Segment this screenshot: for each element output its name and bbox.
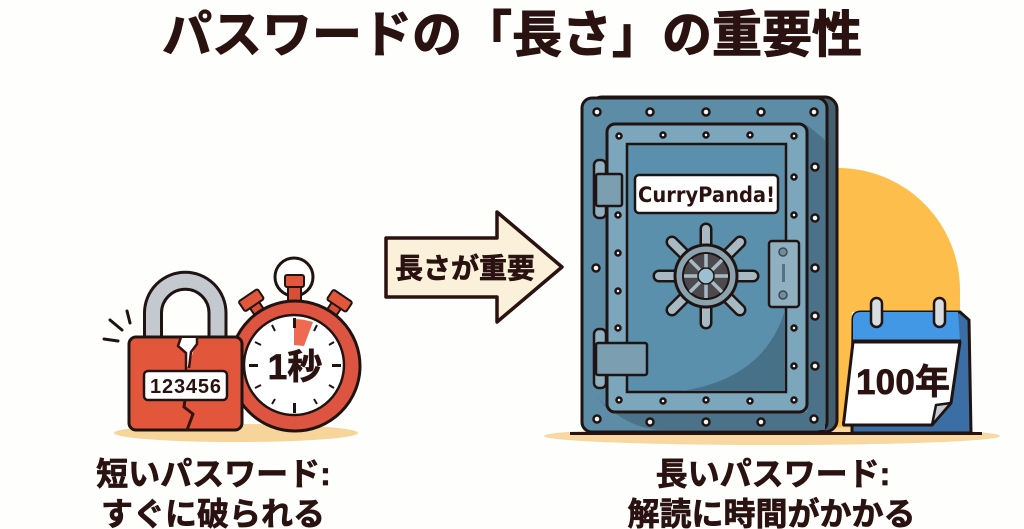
bottom hinge	[594, 329, 647, 388]
password label: CurryPanda!: CurryPanda!	[638, 183, 775, 207]
password label: 123456: 123456	[150, 376, 221, 398]
icon: calendar: 100年	[856, 363, 950, 402]
caption: short password: 短いパスワード:	[96, 456, 331, 492]
caption: long password	[627, 456, 916, 529]
long password illustration	[544, 97, 1000, 445]
yellow sun backdrop	[830, 168, 960, 433]
arrow: 長さが重要	[395, 252, 535, 284]
vault wheel	[659, 229, 753, 323]
icon: cracked padlock	[129, 281, 242, 430]
rivets	[592, 108, 818, 426]
icon: vault door	[582, 97, 837, 432]
icon: stopwatch: 1秒	[268, 348, 322, 387]
ground shadow and line	[544, 427, 1000, 445]
caption: short password	[96, 456, 331, 529]
password label: CurryPanda!	[635, 175, 778, 213]
title: パスワードの「長さ」の重要性	[162, 7, 862, 63]
password label: 123456	[144, 371, 227, 400]
short password illustration	[104, 258, 360, 442]
icon: impact marks	[104, 311, 130, 341]
top hinge	[594, 160, 622, 218]
caption: long password: 長いパスワード:	[656, 456, 890, 492]
arrow	[386, 212, 562, 322]
latch	[769, 241, 799, 307]
ground shadow: lock	[114, 424, 358, 442]
inner panel	[627, 144, 786, 392]
icon: calendar	[844, 298, 971, 433]
icon: stopwatch	[230, 258, 360, 431]
